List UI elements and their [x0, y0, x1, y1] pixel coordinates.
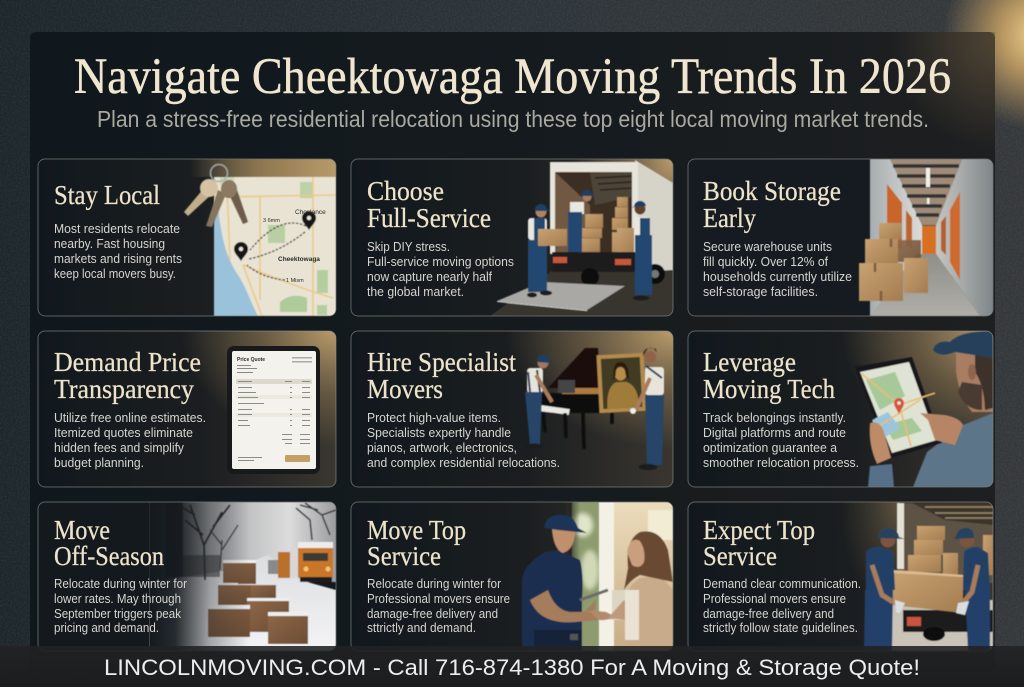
heading [367, 514, 466, 571]
heading: Movers [367, 373, 443, 404]
heading: Service [703, 540, 777, 571]
body text: sttrictly and demand. [367, 620, 476, 635]
footer text: LINCOLNMOVING.COM - Call 716-874-1380 For A Moving & Storage Quote! [104, 655, 920, 680]
body text: the global market. [367, 284, 464, 299]
heading [54, 346, 201, 404]
body text: pianos, artwork, electronics, [367, 440, 517, 455]
body text: Professional movers ensure [703, 591, 846, 606]
body text: damage-free delivery and [367, 606, 498, 621]
body text: now capture nearly half [367, 269, 492, 284]
illustration: movers loading truck [490, 159, 673, 316]
body text: Relocate during winter for [54, 576, 188, 591]
heading: Expect Top [703, 514, 815, 545]
heading: Off-Season [54, 540, 164, 571]
card: Stay Local [38, 159, 336, 316]
heading [367, 175, 491, 233]
heading [367, 346, 516, 404]
illustration: two movers carrying large box [850, 502, 993, 650]
body text [367, 576, 510, 635]
body text: budget planning. [54, 455, 144, 470]
subtitle: Plan a stress-free residential relocation using these top eight local moving market trends. [97, 106, 929, 132]
card: Hire Specialist Movers [351, 331, 673, 487]
body text: households currently utilize [703, 269, 852, 284]
illustration: map and keys: 1 Mism [286, 278, 304, 284]
body text: Secure warehouse units [703, 239, 832, 254]
heading: Move [54, 514, 110, 545]
body text: keep local movers busy. [54, 266, 176, 281]
heading: Demand Price [54, 346, 201, 377]
illustration: map and keys: 3 6mm [263, 218, 280, 224]
body text: Utilize free online estimates. [54, 410, 206, 425]
body text: Digital platforms and route [703, 425, 846, 440]
body text: Itemized quotes eliminate [54, 425, 193, 440]
body text: Skip DIY stress. [367, 239, 450, 254]
heading: Move Top [367, 514, 466, 545]
card: Move Top Service [351, 502, 673, 651]
body text [367, 239, 514, 299]
body text [703, 239, 852, 299]
body text: Specialists expertly handle [367, 425, 511, 440]
body text [703, 410, 859, 470]
heading [54, 514, 164, 571]
illustration: storage corridor with boxes [859, 159, 993, 316]
body text [703, 576, 861, 635]
body text: smoother relocation process. [703, 455, 859, 470]
heading: Early [703, 202, 756, 233]
heading: Hire Specialist [367, 346, 516, 377]
card: Book Storage Early [688, 159, 993, 316]
body text: Demand clear communication. [703, 576, 861, 591]
heading: Leverage [703, 346, 796, 377]
card: Leverage Moving Tech [688, 331, 993, 487]
illustration: man using tablet map [850, 331, 993, 487]
illustration: map and keys: Choslance [295, 209, 326, 216]
body text: Professional movers ensure [367, 591, 510, 606]
body text: hidden fees and simplify [54, 440, 184, 455]
body text: lower rates. May through [54, 591, 181, 606]
body text: and complex residential relocations. [367, 455, 560, 470]
body text: Relocate during winter for [367, 576, 502, 591]
body text: strictly follow state guidelines. [703, 620, 858, 635]
heading [703, 514, 815, 571]
body text: September triggers peak [54, 606, 181, 621]
illustration: map and keys: Cheektowaga [278, 256, 320, 263]
card: Demand Price Transparency [38, 331, 336, 487]
heading [703, 346, 835, 404]
body text: Track belongings instantly. [703, 410, 846, 425]
heading: Service [367, 540, 441, 571]
card: Move Off-Season [38, 502, 336, 651]
footer band with call to action [0, 646, 1024, 687]
heading: Full-Service [367, 202, 491, 233]
body text: fill quickly. Over 12% of [703, 254, 828, 269]
card: Choose Full-Service [351, 159, 673, 316]
title: Navigate Cheektowaga Moving Trends In 2026 [74, 49, 951, 105]
heading: Stay Local [54, 179, 160, 210]
body text [54, 576, 188, 635]
illustration: mover shaking hands with customer [522, 502, 673, 651]
body text [54, 221, 182, 281]
illustration: price quote tablet [190, 331, 336, 474]
illustration: piano and painting movers [516, 331, 673, 470]
heading: Moving Tech [703, 373, 835, 404]
body text: Protect high-value items. [367, 410, 501, 425]
heading [703, 175, 841, 233]
heading: Book Storage [703, 175, 841, 206]
heading: Choose [367, 175, 444, 206]
body text [54, 410, 206, 470]
illustration: winter street with boxes [150, 502, 336, 651]
illustration: price quote tablet: Price Quote [237, 357, 265, 363]
illustration: map and keys [184, 159, 336, 316]
body text: markets and rising rents [54, 251, 182, 266]
body text: optimization guarantee a [703, 440, 838, 455]
body text: nearby. Fast housing [54, 236, 165, 251]
heading: Transparency [54, 373, 194, 404]
body text: Full-service moving options [367, 254, 514, 269]
body text: self-storage facilities. [703, 284, 818, 299]
body text [367, 410, 560, 470]
body text: pricing and demand. [54, 620, 159, 635]
body text: damage-free delivery and [703, 606, 834, 621]
card: Expect Top Service [688, 502, 993, 651]
body text: Most residents relocate [54, 221, 180, 236]
